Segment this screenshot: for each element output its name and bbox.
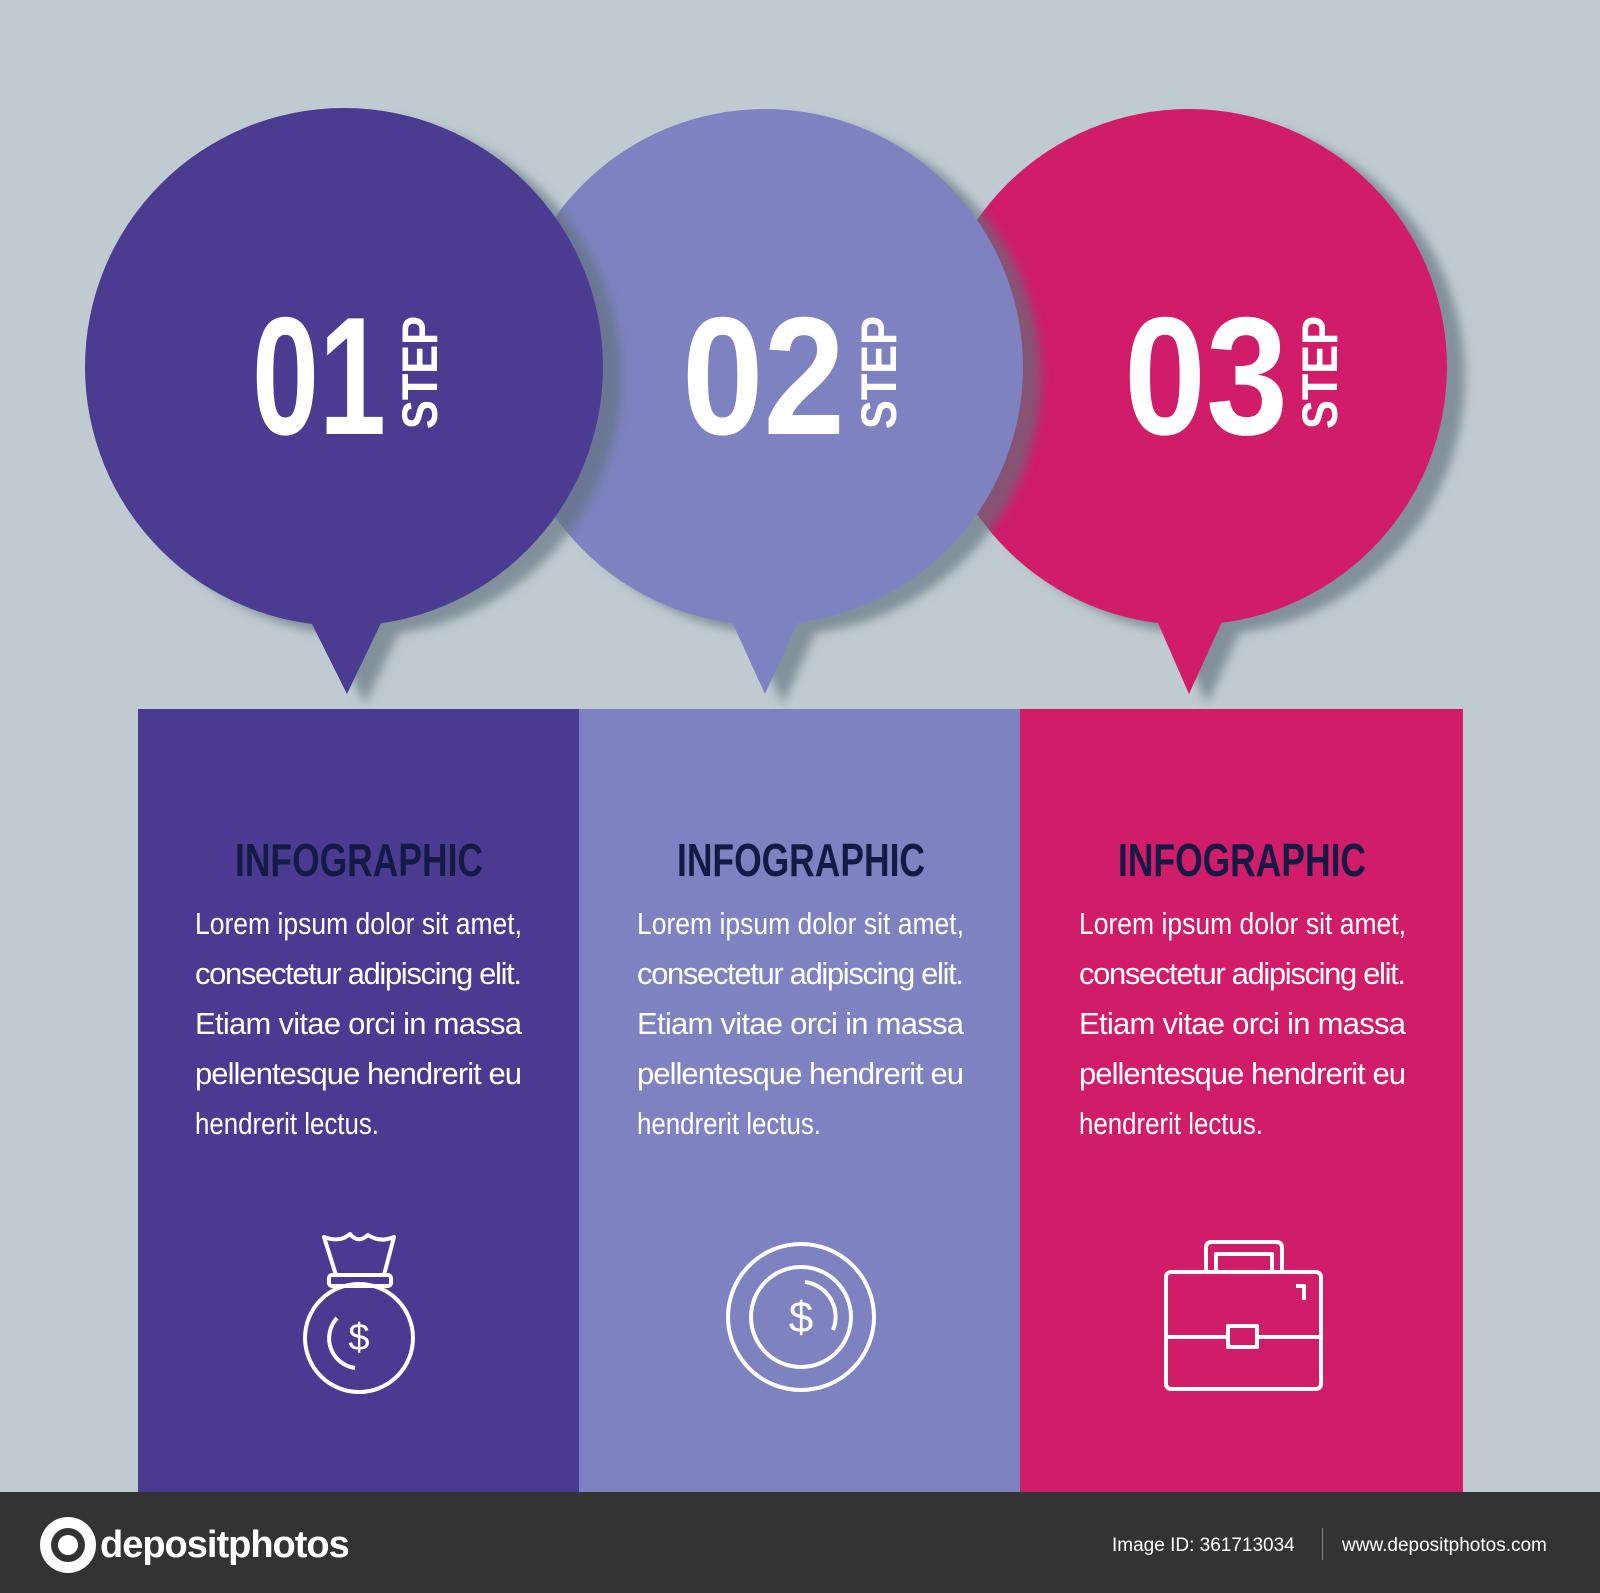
panel: step 1 (138, 709, 580, 1493)
number: step 3: 03 (1124, 282, 1288, 470)
text block: step 2 (637, 906, 965, 1141)
number: step 2: STEP (851, 316, 907, 429)
number: step 3: STEP (1292, 316, 1348, 429)
panel: step 2 (579, 709, 1021, 1493)
circle: step 1 (85, 108, 603, 694)
text block: step 2: Etiam vitae orci in massa (637, 1006, 965, 1041)
text block: step 2: hendrerit lectus. (637, 1106, 821, 1141)
text block: step 3: pellentesque hendrerit eu (1079, 1056, 1406, 1091)
icon: camera logo (40, 1517, 96, 1573)
text block: step 1 (195, 906, 523, 1141)
heading: step 1: INFOGRAPHIC (235, 834, 483, 886)
icon: coin: $ (789, 1293, 813, 1342)
text block: step 1: Lorem ipsum dolor sit amet, (195, 906, 522, 941)
text block: step 2: Lorem ipsum dolor sit amet, (637, 906, 964, 941)
icon: money bag (305, 1234, 413, 1392)
number: step 2: 02 (682, 282, 845, 470)
icon: money bag: $ (348, 1317, 370, 1359)
circle: step 2 (507, 109, 1023, 694)
text block: step 3: Lorem ipsum dolor sit amet, (1079, 906, 1406, 941)
text block: step 3: Etiam vitae orci in massa (1079, 1006, 1407, 1041)
text block: step 2: pellentesque hendrerit eu (637, 1056, 964, 1091)
footer image id: Image ID: 361713034 (1112, 1535, 1295, 1556)
text block: step 3: consectetur adipiscing elit. (1079, 956, 1406, 991)
footer bar (0, 1492, 1600, 1593)
number: step 1: STEP (392, 316, 448, 429)
text block: step 3: hendrerit lectus. (1079, 1106, 1263, 1141)
panel: step 3 (1020, 709, 1463, 1493)
footer brand: depositphotos (100, 1524, 349, 1566)
heading: step 3: INFOGRAPHIC (1118, 834, 1366, 886)
icon: coin (728, 1244, 874, 1390)
text block: step 1: pellentesque hendrerit eu (195, 1056, 522, 1091)
text block: step 1: hendrerit lectus. (195, 1106, 379, 1141)
number: step 1: 01 (252, 282, 386, 470)
footer url: www.depositphotos.com (1341, 1535, 1547, 1556)
text block: step 3 (1079, 906, 1407, 1141)
text block: step 1: consectetur adipiscing elit. (195, 956, 522, 991)
heading: step 2: INFOGRAPHIC (677, 834, 925, 886)
text block: step 1: Etiam vitae orci in massa (195, 1006, 523, 1041)
circle: step 3 (931, 109, 1447, 694)
text block: step 2: consectetur adipiscing elit. (637, 956, 964, 991)
icon: briefcase (1166, 1242, 1321, 1389)
